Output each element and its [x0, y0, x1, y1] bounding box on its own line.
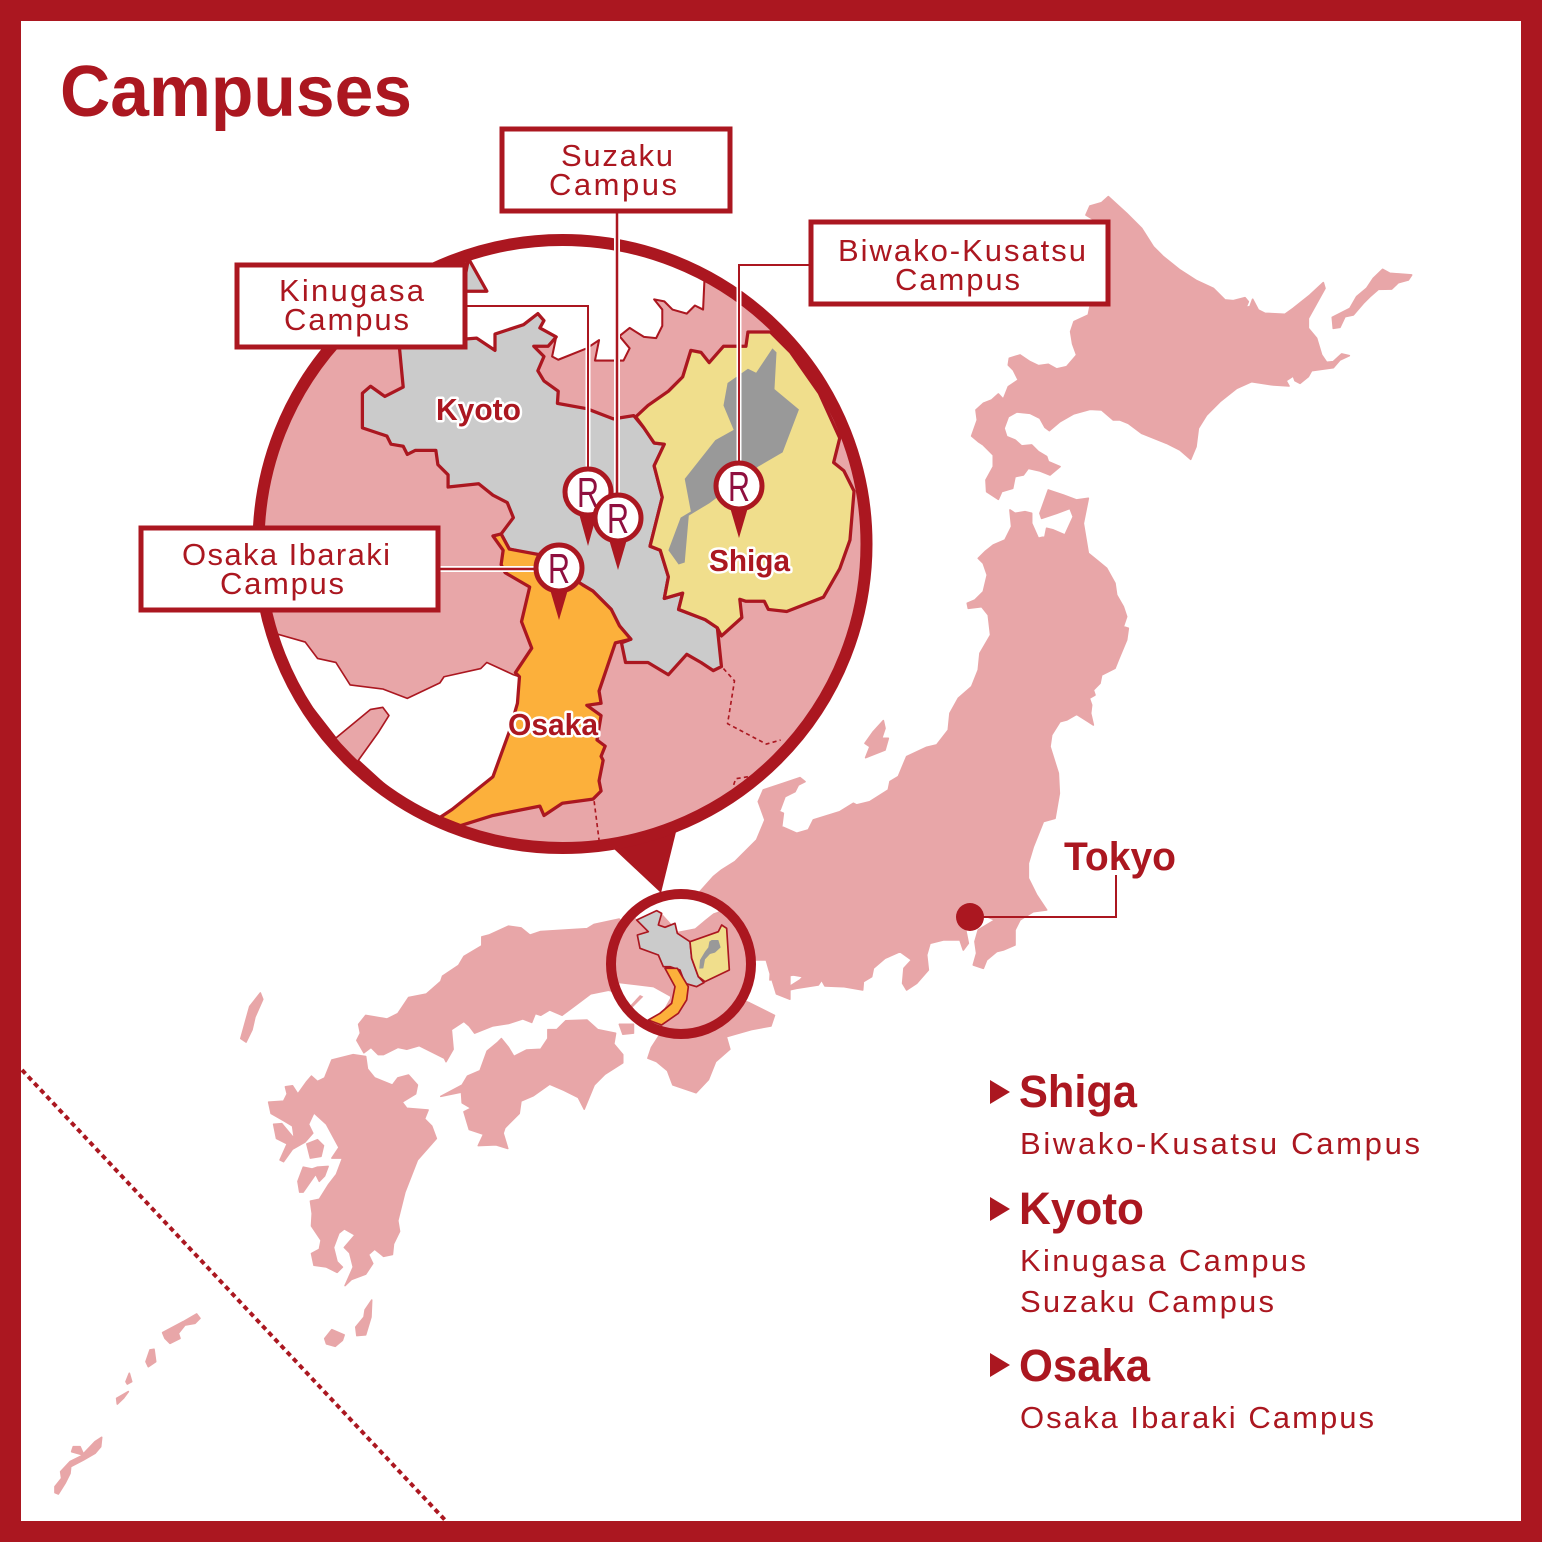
connector: Biwako-Kusatsu [739, 265, 810, 470]
zoom circle ring [258, 240, 866, 848]
Tanegashima [356, 1300, 372, 1336]
pin: Osaka Ibaraki [536, 545, 582, 620]
inset Kyoto [637, 911, 704, 987]
label box: Osaka Ibaraki Campus: Campus [220, 566, 344, 601]
inset Shiga [690, 925, 729, 982]
region label: Shiga: Shiga [709, 543, 791, 578]
pin: Biwako-Kusatsu: R [728, 463, 750, 510]
label box: Kinugasa Campus [237, 265, 465, 347]
legend: Shiga: Biwako-Kusatsu Campus [1020, 1126, 1420, 1161]
Yakushima [325, 1330, 344, 1346]
connector: Osaka Ibaraki [440, 566, 540, 572]
Kyushu [269, 1055, 436, 1286]
Shikoku [441, 1020, 623, 1149]
legend: Kyoto [990, 1183, 1306, 1319]
label box: Suzaku Campus: Campus [549, 167, 677, 202]
Sea of Japan [466, 246, 706, 362]
pin: Biwako-Kusatsu [716, 463, 762, 538]
Shiga prefecture [636, 332, 854, 636]
pin: Kinugasa: R [577, 469, 599, 516]
map of Japan [55, 197, 1412, 1494]
Kii peninsula [648, 981, 775, 1093]
locator circle: Kansai inset [619, 902, 746, 1027]
pin: Osaka Ibaraki: R [548, 545, 570, 592]
legend: Kyoto: Suzaku Campus [1020, 1284, 1274, 1319]
label box: Biwako-Kusatsu Campus: Biwako-Kusatsu [838, 233, 1086, 268]
pin: Suzaku: R [607, 495, 629, 542]
inset lake [699, 940, 721, 969]
legend: Kyoto: Kyoto [1019, 1183, 1144, 1234]
pin: Suzaku [595, 495, 641, 570]
label box: Osaka Ibaraki Campus: Osaka Ibaraki [182, 537, 390, 572]
region label: Osaka: Osaka [508, 707, 599, 742]
label box: Osaka Ibaraki Campus [141, 528, 438, 610]
Lake Biwa [668, 348, 799, 565]
legend: Osaka: Osaka [1019, 1340, 1151, 1391]
label box: Biwako-Kusatsu Campus: Campus [895, 262, 1020, 297]
Osaka prefecture [440, 534, 631, 826]
zoomed regions [264, 222, 854, 840]
Kyoto prefecture [362, 259, 721, 675]
Awaji fragment [619, 1024, 634, 1034]
connector: Kinugasa [465, 306, 588, 475]
locator ring [611, 894, 751, 1034]
Ise peninsula tip [762, 946, 790, 999]
label box: Biwako-Kusatsu Campus [811, 222, 1108, 304]
Hokkaido and Kurils [972, 197, 1412, 499]
prefecture dashed borders [594, 669, 781, 840]
legend [990, 1066, 1420, 1435]
connector: Suzaku [614, 212, 620, 500]
Tokyo marker: Tokyo [1064, 835, 1176, 879]
title: Campuses [60, 52, 412, 132]
zoomed circle map [240, 220, 880, 860]
legend: Kyoto: Kinugasa Campus [1020, 1243, 1306, 1278]
inset background [619, 902, 746, 1027]
Tsushima [241, 993, 263, 1042]
zoomed map clip group [265, 260, 860, 842]
legend: Shiga: Shiga [1019, 1066, 1138, 1117]
legend: Shiga [990, 1066, 1420, 1161]
pin: Kinugasa [565, 469, 611, 546]
dotted boundary line [22, 1070, 445, 1520]
legend: Osaka: Osaka Ibaraki Campus [1020, 1400, 1374, 1435]
Ryukyu islands [55, 1314, 200, 1494]
callout pointer [613, 832, 676, 893]
land background [265, 262, 860, 842]
Osaka Bay [278, 634, 518, 816]
western Japan [241, 919, 790, 1346]
inset Osaka [648, 968, 688, 1025]
label box: Suzaku Campus: Suzaku [561, 138, 673, 173]
Tokyo marker [956, 835, 1176, 931]
label box: Suzaku Campus [502, 129, 730, 211]
eastern Honshu and Sado [700, 490, 1128, 992]
legend: Osaka [990, 1340, 1374, 1435]
label box: Kinugasa Campus: Campus [284, 302, 409, 337]
region label: Kyoto: Kyoto [436, 392, 521, 427]
Kyushu islets [298, 1140, 328, 1192]
western Honshu [357, 919, 659, 1062]
label box: Kinugasa Campus: Kinugasa [279, 273, 425, 308]
